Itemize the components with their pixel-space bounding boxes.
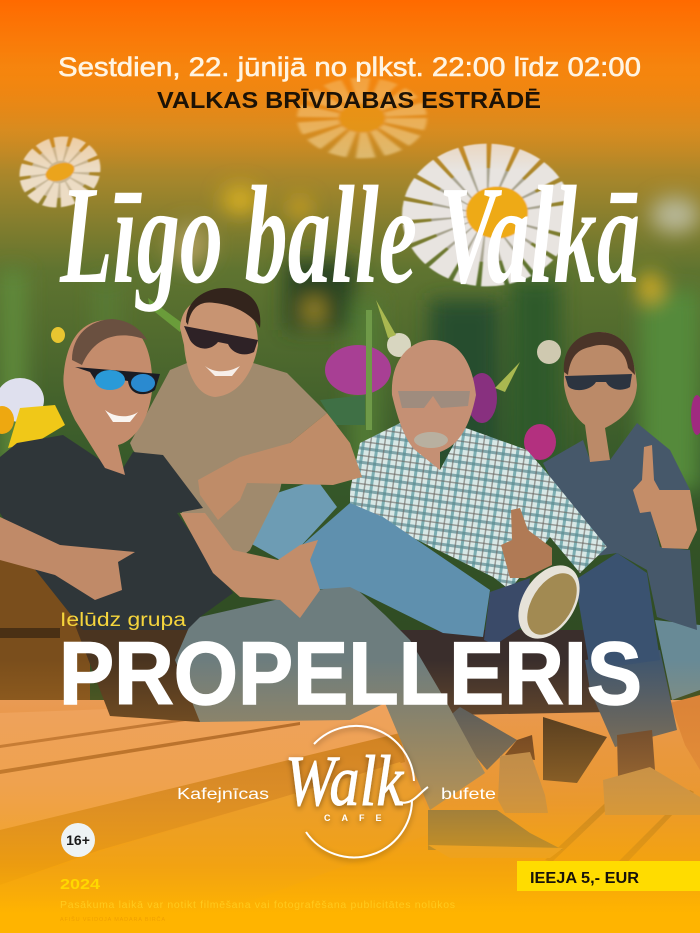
sunglasses	[184, 326, 258, 354]
venue line: VALKAS BRĪVDABAS ESTRĀDĒ	[157, 87, 541, 113]
glasses	[398, 391, 470, 408]
logo caption left: Kafejnīcas	[177, 786, 269, 803]
logo: Walk Cafe: Walk	[285, 742, 404, 821]
far right man arm and thumb	[633, 445, 697, 549]
bottom colour wash	[0, 660, 700, 933]
blue sunglasses	[75, 367, 160, 394]
thumbs-up hand	[501, 508, 552, 578]
raised shoe	[484, 578, 530, 645]
logo caption right: bufete	[441, 786, 496, 803]
person: man in dark t-shirt with blue sunglasses	[0, 319, 592, 858]
far right man t-shirt	[543, 423, 697, 630]
year: 2024	[60, 876, 101, 893]
plaid shirt	[350, 423, 607, 590]
flower: upper faded daisy	[320, 92, 404, 144]
date and time line: Sestdien, 22. jūnijā no plkst. 22:00 līdz 02:00	[58, 52, 641, 82]
t-shirt	[0, 435, 233, 630]
raised leg jeans	[293, 503, 490, 637]
flowers: clover and yellow blossoms	[0, 298, 700, 460]
filming notice: Pasākuma laikā var notikt filmēšana vai fotografēšana publicitātes nolūkos	[60, 899, 455, 911]
age badge: 16+	[66, 832, 90, 848]
beige t-shirt	[130, 363, 327, 570]
arm and hand	[198, 413, 362, 520]
far right man shorts and leg	[655, 620, 700, 700]
age badge	[61, 823, 95, 857]
logo: Walk Cafe: CAFE	[324, 813, 392, 823]
entry price label: IEEJA 5,- EUR	[530, 870, 639, 887]
lower body jeans	[150, 583, 485, 810]
bench and deck	[0, 560, 700, 933]
person: far right in blue t-shirt	[543, 332, 700, 770]
flower: large daisy	[431, 168, 543, 262]
head	[63, 320, 152, 475]
bald head	[392, 340, 476, 470]
front shoe	[428, 810, 563, 850]
flower: left daisy	[24, 138, 96, 206]
top colour wash	[0, 0, 700, 170]
person: man in plaid shirt	[350, 340, 607, 590]
logo: Walk Cafe	[285, 726, 428, 857]
entry price label	[517, 861, 700, 891]
far right man sunglasses	[565, 374, 632, 390]
designer credit: AFIŠU VEIDOJA MADARA BIRČA	[60, 916, 165, 923]
band invitation line: Ielūdz grupa	[60, 610, 187, 631]
jeans knee	[250, 480, 337, 560]
arms and hands	[0, 517, 135, 600]
head	[180, 297, 258, 397]
person: man in beige t-shirt	[130, 288, 362, 570]
band name: PROPELLERIS	[59, 623, 642, 723]
far right man head	[564, 332, 637, 462]
seated legs and shoes behind the front man	[400, 553, 700, 815]
